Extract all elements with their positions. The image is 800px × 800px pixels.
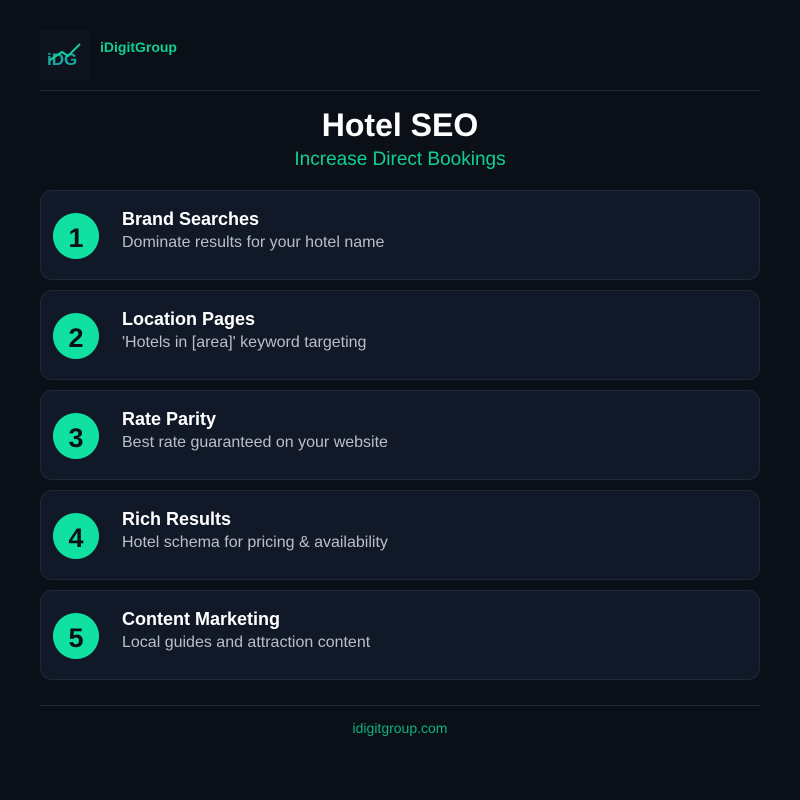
card 4: Hotel schema for pricing & availability: [122, 534, 388, 551]
card 1: Brand Searches: [122, 209, 259, 229]
card 1: [40, 190, 760, 280]
logo: [40, 30, 90, 80]
card 3: 3: [68, 423, 84, 453]
subtitle: Increase Direct Bookings: [294, 149, 506, 170]
card 5: 5: [68, 623, 84, 653]
card 4: Rich Results: [122, 509, 231, 529]
card 1: Dominate results for your hotel name: [122, 234, 384, 251]
card 4: 4: [68, 523, 84, 553]
footer: idigitgroup.com: [353, 720, 447, 736]
logo: iDG: [47, 50, 77, 69]
card 2: 2: [68, 323, 84, 353]
title: Hotel SEO: [322, 107, 478, 143]
card 2: [40, 290, 760, 380]
card 5: [40, 590, 760, 680]
card 2: Location Pages: [122, 309, 255, 329]
card 3: Best rate guaranteed on your website: [122, 434, 388, 451]
card 5: Local guides and attraction content: [122, 634, 370, 651]
card 3: Rate Parity: [122, 409, 216, 429]
card 2: 'Hotels in [area]' keyword targeting: [122, 334, 366, 351]
card 3: [40, 390, 760, 480]
card 5: Content Marketing: [122, 609, 280, 629]
card 1: 1: [68, 223, 84, 253]
card 4: [40, 490, 760, 580]
brand name: iDigitGroup: [100, 39, 177, 55]
